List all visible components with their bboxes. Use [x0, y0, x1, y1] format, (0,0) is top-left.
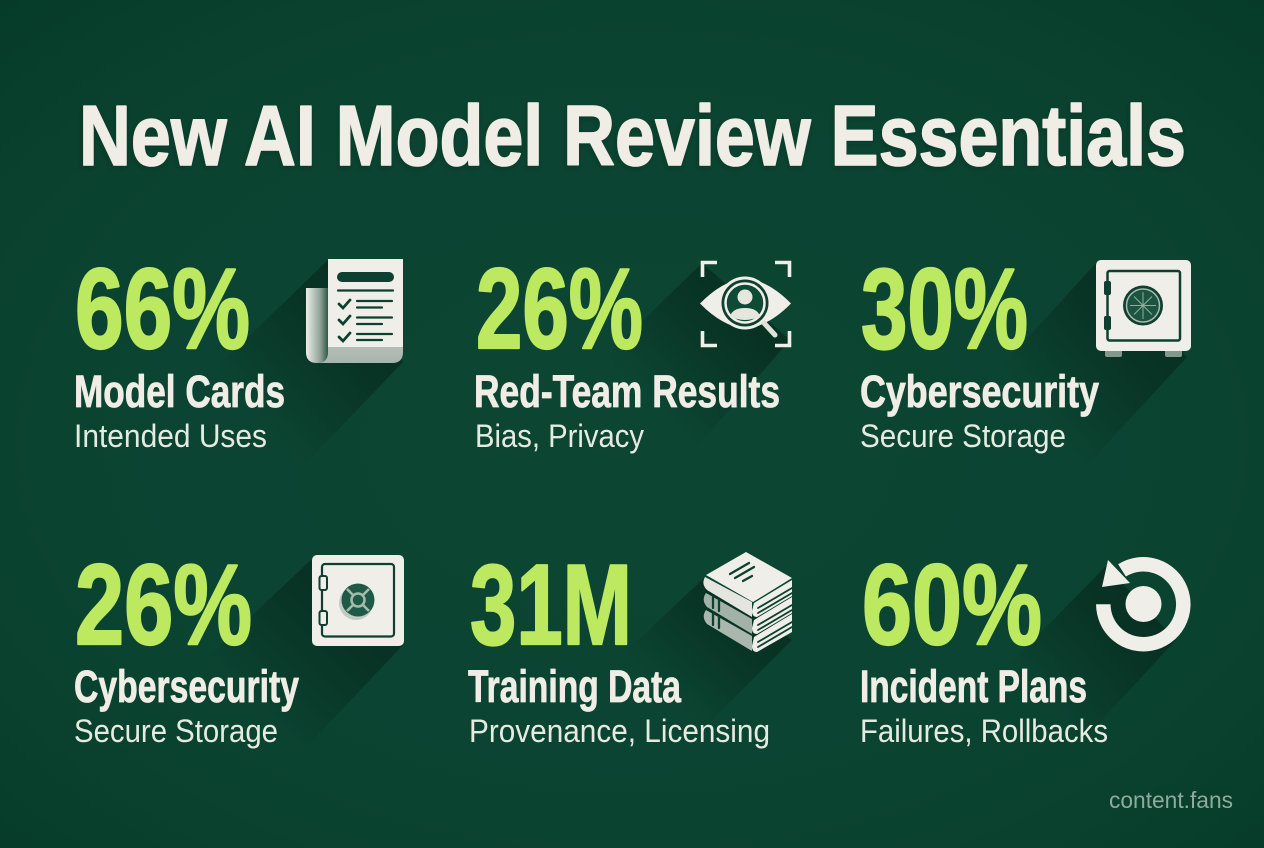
panel: incident plans	[860, 542, 1183, 749]
stat: 30%: 30%	[861, 246, 1028, 373]
icon: document checklist	[306, 259, 403, 363]
subtext: bias, privacy: Bias, Privacy	[475, 418, 644, 454]
heading: red-team results: Red-Team Results	[474, 366, 780, 417]
heading: model cards: Model Cards	[74, 366, 285, 417]
subtext: secure storage: Secure Storage	[860, 418, 1066, 454]
icon: rollback arrow circle	[1102, 560, 1183, 644]
stat: 26%: 26%	[75, 542, 252, 669]
long diagonal icon shadows	[196, 260, 1187, 758]
watermark: content.fans	[1109, 787, 1233, 813]
panel: red-team results	[474, 246, 791, 454]
middle book	[704, 593, 792, 634]
panel: training data	[468, 542, 792, 749]
panel: cybersecurity bottom	[74, 542, 404, 749]
stat: 60%: 60%	[862, 542, 1042, 669]
icon: eye with magnifier	[700, 262, 791, 346]
heading: cybersecurity: Cybersecurity	[860, 366, 1099, 417]
icon: safe with handle	[312, 555, 404, 646]
heading: incident plans: Incident Plans	[860, 661, 1087, 712]
heading: cybersecurity: Cybersecurity	[74, 661, 299, 712]
icon: stack of books	[703, 552, 792, 652]
icon: safe with dial	[1096, 260, 1191, 357]
top book	[703, 552, 792, 617]
heading: training data: Training Data	[468, 661, 682, 712]
subtext: secure storage: Secure Storage	[74, 713, 278, 749]
stat: 31M: 31M	[470, 542, 632, 669]
panel: cybersecurity top	[860, 246, 1191, 454]
subtext: intended uses: Intended Uses	[74, 418, 267, 454]
subtext: provenance, licensing: Provenance, Licensing	[469, 713, 770, 749]
bottom book	[704, 610, 792, 652]
stat: 26%: 26%	[476, 246, 643, 373]
subtext: failures, rollbacks: Failures, Rollbacks	[860, 713, 1108, 749]
stat: 66%: 66%	[75, 246, 250, 373]
panel: model cards	[74, 246, 403, 454]
